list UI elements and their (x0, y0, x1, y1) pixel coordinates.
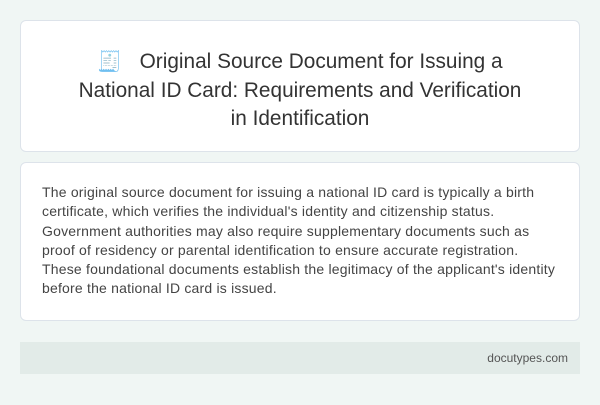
description text: The original source document for issuing a national ID card is typically a birth (42, 184, 534, 200)
title: National ID Card: Requirements and Verification (79, 78, 521, 102)
body card (20, 162, 580, 321)
title card (20, 20, 580, 152)
description text: before the national ID card is issued. (42, 280, 277, 296)
description text: certificate, which verifies the individual's identity and citizenship status. (42, 203, 494, 219)
footer (20, 342, 580, 374)
description text: These foundational documents establish the legitimacy of the applicant's identity (42, 261, 555, 277)
footer: docutypes.com (487, 351, 568, 365)
description text: proof of residency or parental identification to ensure accurate registration. (42, 242, 518, 258)
title: 🧾 Original Source Document for Issuing a (97, 50, 503, 73)
description text: Government authorities may also require supplementary documents such as (42, 223, 529, 239)
description text (42, 184, 555, 296)
title (79, 50, 521, 130)
title: in Identification (231, 107, 369, 130)
